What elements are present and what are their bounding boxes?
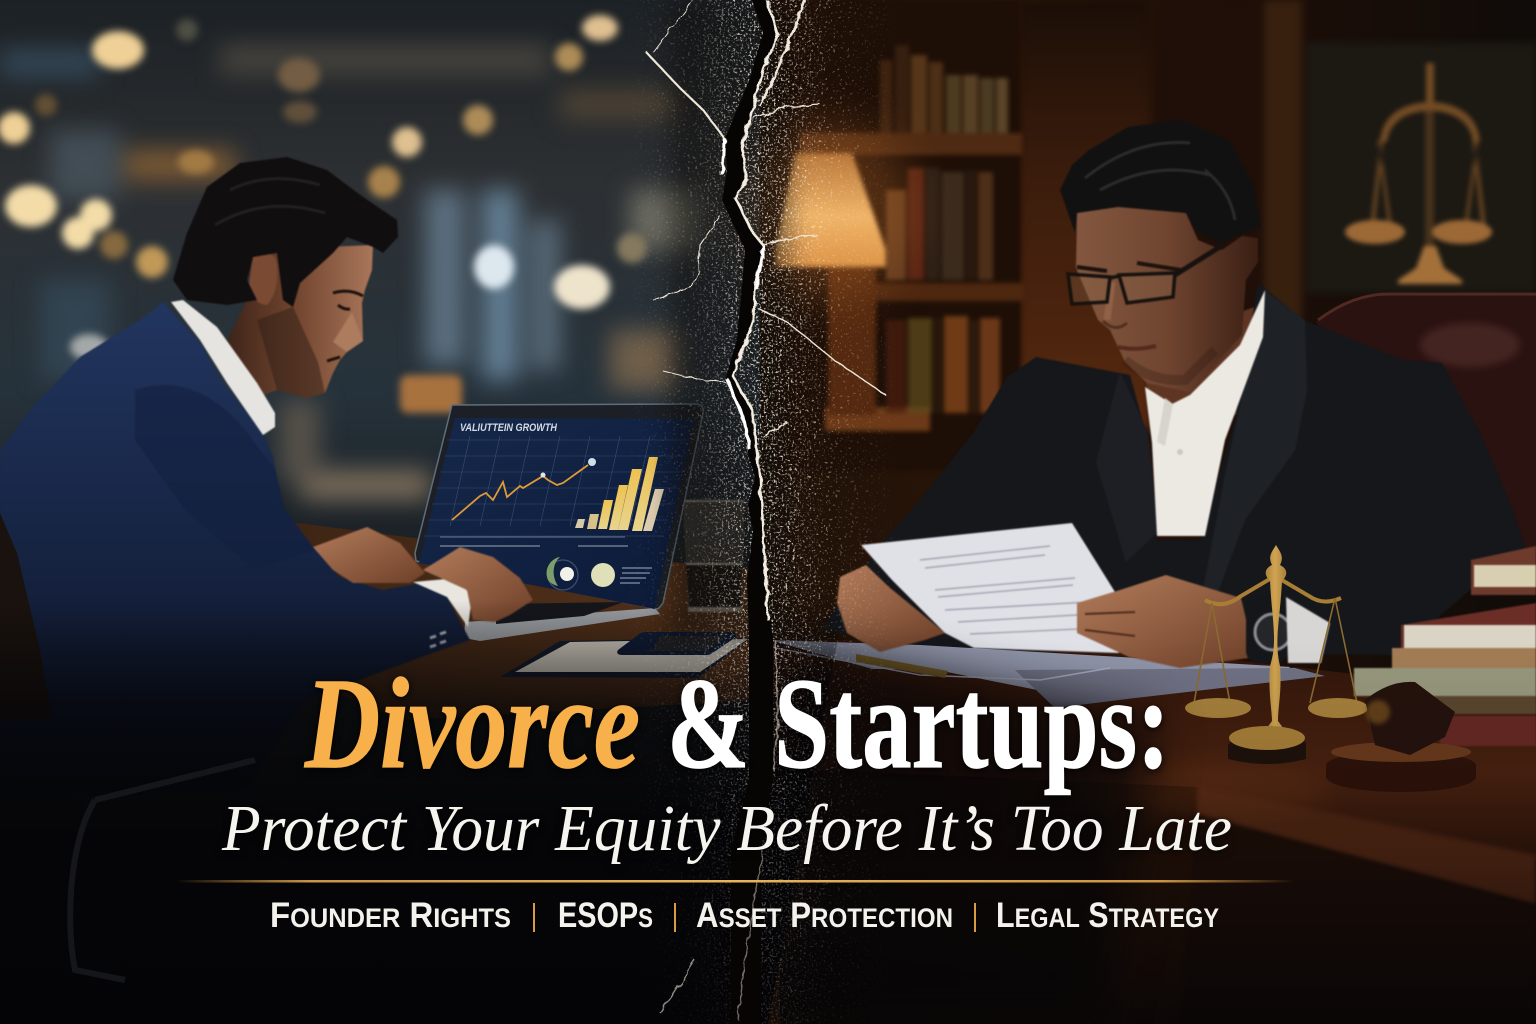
- bookshelf with books: [780, 0, 1024, 470]
- tag separators: [534, 903, 975, 932]
- crack branches: [645, 0, 887, 1020]
- wooden gavel: [1326, 682, 1476, 792]
- hair: [173, 157, 398, 307]
- white shirt collar: [171, 300, 275, 435]
- dashboard gauges: [440, 537, 652, 590]
- laptop: [415, 404, 703, 641]
- book stack: [1354, 546, 1536, 746]
- neck and face: [225, 245, 373, 400]
- beard shading: [257, 307, 325, 398]
- cracked glass speckle band: [620, 0, 900, 1024]
- neck: [1145, 305, 1260, 455]
- dark fade at bottom: [0, 600, 1536, 1024]
- framed scales of justice on wall: [1345, 63, 1492, 284]
- left man: founder in navy blazer: [0, 157, 533, 800]
- gold divider rule: [175, 880, 1295, 882]
- laptop base: [464, 608, 660, 641]
- papers stack on desk: [760, 640, 1325, 708]
- title word: Divorce: Divorce: [304, 652, 640, 796]
- right hand: [1077, 575, 1255, 668]
- tag: legal strategy: LEGAL STRATEGY: [996, 896, 1219, 935]
- crack shadow band: [670, 0, 790, 640]
- background: law office wood wall (right): [760, 0, 1536, 1024]
- left hand: [837, 565, 945, 652]
- blazer: [0, 302, 470, 800]
- hair: [1060, 120, 1261, 243]
- tag: founder rights: FOUNDER RIGHTS: [270, 896, 511, 935]
- growth line chart: [452, 458, 596, 520]
- right man: lawyer in black robe: [822, 120, 1528, 655]
- rear typing hand: [313, 527, 425, 583]
- subtitle: Protect Your Equity Before It’s Too Late: [221, 792, 1232, 865]
- wood panel: [1020, 0, 1536, 430]
- title: [304, 652, 1170, 796]
- paper: [861, 523, 1119, 653]
- glasses: [1068, 245, 1223, 304]
- title words: & Startups:: & Startups:: [667, 652, 1170, 796]
- robe: [822, 283, 1528, 655]
- laptop screen frame: [415, 404, 703, 609]
- notepad and smartphone: [500, 632, 750, 678]
- chart grid: [424, 436, 687, 536]
- bright crack edge: [645, 0, 887, 1020]
- nose highlight: [333, 312, 363, 352]
- blazer sleeve shadow: [135, 385, 315, 570]
- tag: asset protection: ASSET PROTECTION: [696, 896, 953, 935]
- brow, eye, mouth: [327, 291, 363, 361]
- laptop display: [419, 418, 694, 609]
- shirt cuff: [1286, 597, 1330, 663]
- gold clipboard clip: [856, 654, 948, 678]
- background: bokeh office (left): [0, 0, 780, 1024]
- right desk: [760, 640, 1536, 1024]
- brass scale on desk: [1185, 545, 1368, 764]
- topic tags row: [270, 896, 1219, 935]
- sleeve buttons: [430, 632, 446, 647]
- office chair silhouette: [70, 760, 255, 980]
- office chair back: [0, 513, 52, 720]
- document held by lawyer: [837, 523, 1330, 668]
- dark fracture: [722, 0, 777, 1024]
- face: [1076, 205, 1258, 392]
- leather chair behind lawyer: [1316, 294, 1536, 554]
- left desk: [260, 522, 760, 720]
- white shirt and collar: [1145, 290, 1265, 536]
- central crack: [645, 0, 887, 1024]
- wrist watch: [1246, 597, 1288, 663]
- glass of water: [683, 500, 745, 612]
- front typing hand: [423, 547, 533, 622]
- tag: ESOPs: ESOPS: [558, 896, 653, 935]
- shirt cuff: [413, 578, 472, 627]
- ear: [249, 253, 277, 305]
- growth bar chart: [575, 457, 664, 531]
- table lamp: [745, 125, 915, 415]
- valuation growth label: VALIUTTEIN GROWTH: [460, 422, 558, 434]
- mouth, brows and nose: [1118, 346, 1156, 349]
